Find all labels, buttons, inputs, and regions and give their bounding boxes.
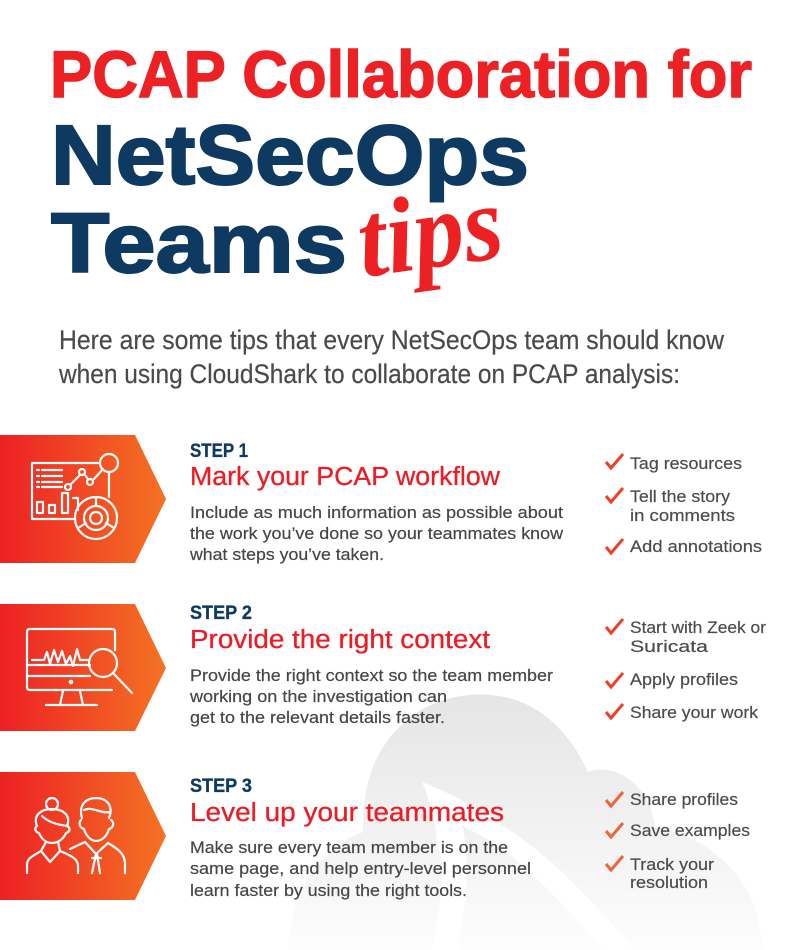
intro text xyxy=(58,325,725,389)
title line 2: NetSecOps xyxy=(51,108,529,202)
step description: same page, and help entry-level personnel xyxy=(190,859,531,878)
panel: step 1 xyxy=(0,435,762,564)
step description: the work you’ve done so your teammates know xyxy=(190,524,564,543)
checklist: Tell the story xyxy=(630,487,731,506)
step label: STEP 3 xyxy=(190,776,252,797)
checklist: resolution xyxy=(630,873,708,892)
arrow badge 2 xyxy=(0,604,166,731)
script word: tips: tips xyxy=(350,163,510,301)
background cloud logo xyxy=(288,695,762,950)
checklist: Tag resources xyxy=(630,454,742,473)
panel: step 2 xyxy=(0,603,766,731)
step heading: Provide the right context xyxy=(190,626,490,654)
checklist xyxy=(606,790,750,892)
step description: Provide the right context so the team member xyxy=(190,666,553,685)
step description: Make sure every team member is on the xyxy=(190,838,508,857)
checklist: Apply profiles xyxy=(630,670,738,689)
checklist xyxy=(606,618,766,722)
arrow badge 3 xyxy=(0,772,166,900)
step label: STEP 2 xyxy=(190,603,252,624)
title line 1: PCAP Collaboration for xyxy=(50,37,752,111)
step description: Include as much information as possible about xyxy=(190,503,563,522)
step heading: Level up your teammates xyxy=(190,799,504,827)
checklist xyxy=(606,454,762,556)
icon: two team members xyxy=(27,798,125,873)
step description xyxy=(189,666,553,727)
intro text: when using CloudShark to collaborate on PCAP analysis: xyxy=(58,359,680,389)
checklist: Start with Zeek or xyxy=(630,618,766,637)
icon: dashboard with charts xyxy=(32,454,118,539)
checklist: Suricata xyxy=(630,637,709,656)
checklist: Share your work xyxy=(630,703,759,722)
checklist: Track your xyxy=(630,855,714,874)
panel: step 3 xyxy=(0,772,750,900)
title line 3: Teams xyxy=(51,196,347,290)
step description: learn faster by using the right tools. xyxy=(190,881,467,900)
step label: STEP 1 xyxy=(190,441,248,462)
checklist: in comments xyxy=(630,506,735,525)
arrow badge 1 xyxy=(0,435,166,563)
checklist: Add annotations xyxy=(630,537,762,556)
intro text: Here are some tips that every NetSecOps team should know xyxy=(59,325,725,355)
step description: what steps you’ve taken. xyxy=(189,545,384,564)
checklist: Save examples xyxy=(630,821,750,840)
step description: working on the investigation can xyxy=(189,687,447,706)
checklist: Share profiles xyxy=(630,790,738,809)
step description: get to the relevant details faster. xyxy=(190,708,445,727)
step description xyxy=(189,503,564,564)
step description xyxy=(190,838,531,900)
icon: monitor with magnifier xyxy=(27,629,132,705)
title xyxy=(50,37,752,301)
step heading: Mark your PCAP workflow xyxy=(190,463,501,491)
